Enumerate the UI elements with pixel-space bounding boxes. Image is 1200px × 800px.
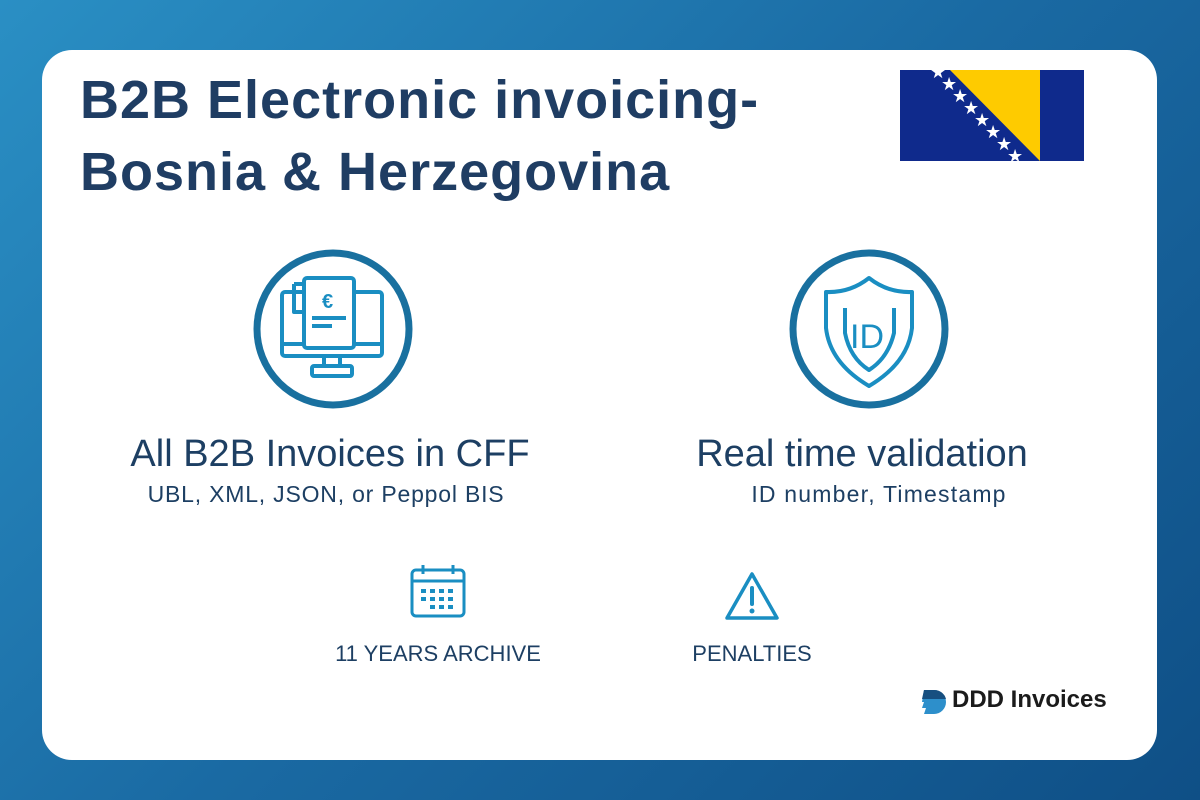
icon: ID shield: ID	[850, 318, 884, 356]
icon: warning	[725, 572, 779, 620]
flag: Bosnia & Herzegovina: ★	[974, 110, 990, 131]
logo: DDD Invoices: DDD Invoices	[952, 686, 1107, 713]
flag: Bosnia & Herzegovina: ★	[996, 134, 1012, 155]
text: formats: UBL, XML, JSON, or Peppol BIS	[148, 481, 504, 507]
heading: validation: Real time validation	[696, 433, 1028, 475]
title: Bosnia & Herzegovina	[80, 142, 670, 202]
title	[80, 70, 759, 202]
icon: ID shield	[790, 250, 948, 408]
flag: Bosnia & Herzegovina	[900, 70, 1084, 161]
label: archive: 11 YEARS ARCHIVE	[335, 641, 541, 666]
text: validation details: ID number, Timestamp	[751, 481, 1007, 507]
flag: Bosnia & Herzegovina: ★	[941, 74, 957, 95]
flag: Bosnia & Herzegovina: ★	[963, 98, 979, 119]
heading: CFF: All B2B Invoices in CFF	[130, 433, 530, 475]
title: B2B Electronic invoicing-	[80, 70, 759, 130]
label: penalties: PENALTIES	[692, 641, 812, 666]
flag: Bosnia & Herzegovina: ★	[985, 122, 1001, 143]
icon: calendar	[410, 565, 466, 618]
flag: Bosnia & Herzegovina: ★	[952, 86, 968, 107]
icon: invoice monitor	[254, 250, 412, 408]
icon: invoice monitor: €	[322, 291, 333, 313]
